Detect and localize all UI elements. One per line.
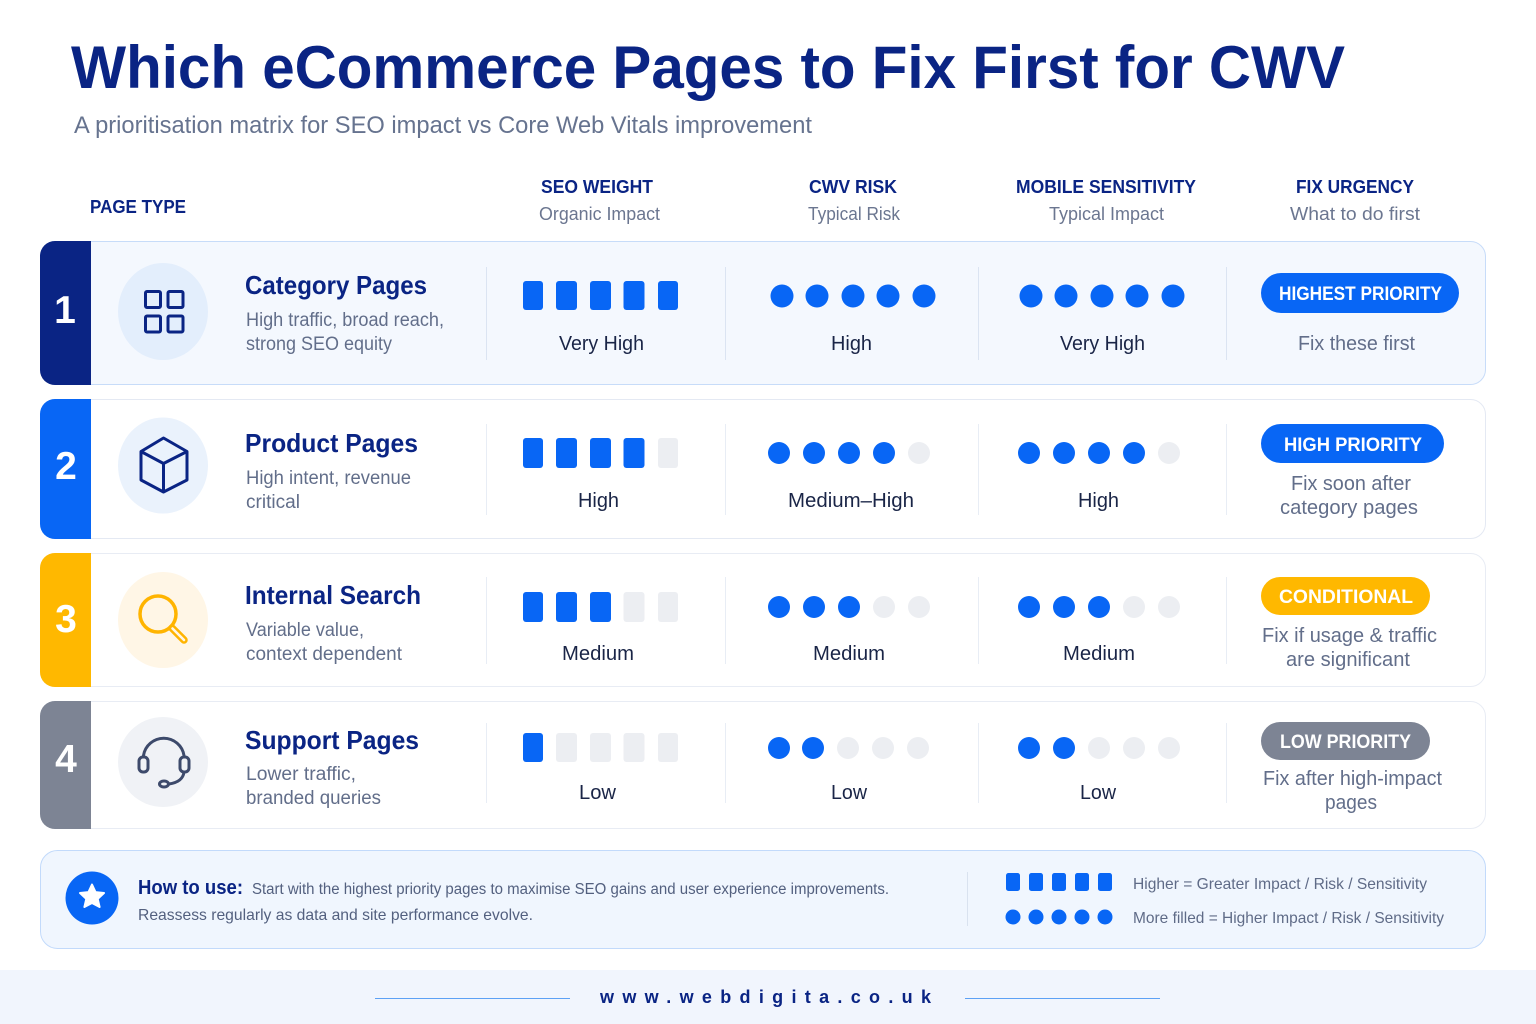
fix urgency: highest priority: HIGHEST PRIORITY (1279, 284, 1442, 305)
how to use text: How to use: (138, 877, 243, 899)
page type text: context dependent (246, 644, 403, 665)
fix urgency: low priority (1261, 722, 1442, 814)
column heading: seo weight (539, 177, 660, 224)
legend (1006, 873, 1444, 927)
seo weight rating: low (523, 733, 678, 804)
how to use text: Reassess regularly as data and site performance evolve. (138, 907, 533, 924)
rank badge 1: 1 (54, 289, 76, 332)
footer band (0, 970, 1536, 1024)
page type text: Internal Search (245, 580, 421, 610)
column heading: page type: PAGE TYPE (90, 197, 186, 217)
page type text: Lower traffic, (246, 764, 356, 785)
fix urgency: low priority: pages (1325, 792, 1377, 814)
column heading: cwv risk: CWV RISK (809, 177, 897, 197)
fix urgency: high priority: category pages (1280, 497, 1418, 519)
column heading: seo weight: Organic Impact (539, 204, 660, 224)
panel: row 1 category pages (40, 241, 1486, 385)
seo weight rating: medium (523, 592, 678, 665)
panel: row 3 internal search (40, 553, 1486, 687)
mobile sensitivity rating: medium: Medium (1063, 643, 1135, 665)
rank badge 4 (40, 701, 91, 829)
page type text: Category Pages (245, 270, 427, 300)
mobile sensitivity rating: high: High (1078, 490, 1119, 512)
fix urgency: high priority (1261, 424, 1444, 519)
seo weight rating: medium: Medium (562, 643, 634, 665)
column heading: fix urgency (1290, 177, 1420, 224)
table header (90, 177, 1420, 224)
column heading: cwv risk (808, 177, 901, 224)
column heading: mobile sensitivity: MOBILE SENSITIVITY (1016, 177, 1196, 197)
mobile sensitivity rating: low (1018, 737, 1180, 804)
mobile sensitivity rating: very high (1020, 284, 1184, 355)
page type text: branded queries (246, 788, 381, 809)
panel: how to use (40, 850, 1486, 948)
mobile sensitivity rating: high (1018, 442, 1180, 512)
page type text: Support Pages (245, 725, 419, 755)
website url: www.webdigita.co.uk (599, 987, 932, 1007)
page type text: strong SEO equity (246, 334, 392, 355)
cwv risk rating: medium: Medium (813, 643, 885, 665)
page type text (245, 725, 419, 809)
legend: bars (1006, 873, 1427, 893)
mobile sensitivity rating: low: Low (1080, 782, 1117, 804)
rank badge 2: 2 (55, 445, 77, 488)
icon: magnifying glass (118, 572, 208, 668)
fix urgency: conditional (1261, 577, 1437, 671)
page type text (245, 580, 421, 665)
cwv risk rating: high: High (831, 333, 872, 355)
how to use text: Start with the highest priority pages to maximise SEO gains and user experience improvements. (252, 881, 889, 898)
cwv risk rating: low (768, 737, 929, 804)
panel: row 4 support pages (40, 701, 1486, 829)
panel: row 2 product pages (40, 399, 1486, 539)
cwv risk rating: high (770, 284, 936, 355)
column heading: cwv risk: Typical Risk (808, 204, 901, 224)
column heading: mobile sensitivity: Typical Impact (1049, 204, 1164, 224)
column heading: fix urgency: What to do first (1290, 204, 1420, 224)
mobile sensitivity rating: very high: Very High (1060, 333, 1145, 355)
page type text: High traffic, broad reach, (246, 310, 444, 331)
seo weight rating: high: High (578, 490, 619, 512)
rank badge 1 (40, 241, 91, 385)
fix urgency: highest priority (1261, 273, 1459, 355)
seo weight rating: very high (523, 281, 678, 355)
legend: dots (1006, 910, 1444, 927)
page type text (245, 428, 418, 513)
icon: headset (118, 717, 208, 807)
legend: dots: More filled = Higher Impact / Risk / Sensitivity (1133, 910, 1444, 927)
cwv risk rating: medium-high (768, 442, 930, 512)
fix urgency: high priority: HIGH PRIORITY (1284, 435, 1422, 456)
fix urgency: conditional: Fix if usage & traffic (1262, 625, 1437, 647)
cwv risk rating: low: Low (831, 782, 868, 804)
page type text: critical (246, 492, 300, 513)
page type text: High intent, revenue (246, 468, 411, 489)
mobile sensitivity rating: medium (1018, 596, 1180, 665)
fix urgency: low priority: Fix after high-impact (1263, 768, 1442, 790)
rank badge 3 (40, 553, 91, 687)
seo weight rating: very high: Very High (559, 333, 644, 355)
column heading: mobile sensitivity (1016, 177, 1196, 224)
fix urgency: highest priority: Fix these first (1298, 333, 1415, 355)
page type text: Variable value, (246, 620, 364, 641)
fix urgency: conditional: CONDITIONAL (1279, 587, 1413, 608)
page type text (245, 270, 444, 355)
how to use text (138, 877, 889, 924)
seo weight rating: low: Low (579, 782, 617, 804)
title: Which eCommerce Pages to Fix First for CWV (71, 34, 1345, 101)
icon: star (66, 872, 118, 924)
seo weight rating: high (523, 438, 678, 512)
page type text: Product Pages (245, 428, 418, 458)
rank badge 4: 4 (55, 738, 77, 781)
column heading: fix urgency: FIX URGENCY (1296, 177, 1414, 197)
fix urgency: low priority: LOW PRIORITY (1280, 732, 1411, 753)
icon: category grid (118, 263, 208, 360)
rank badge 3: 3 (55, 598, 77, 641)
subtitle: A prioritisation matrix for SEO impact vs Core Web Vitals improvement (74, 112, 812, 139)
cwv risk rating: medium-high: Medium–High (788, 490, 914, 512)
column heading: seo weight: SEO WEIGHT (541, 177, 653, 197)
icon: product box (118, 418, 208, 514)
fix urgency: conditional: are significant (1286, 649, 1410, 671)
rank badge 2 (40, 399, 91, 539)
fix urgency: high priority: Fix soon after (1291, 473, 1411, 495)
legend: bars: Higher = Greater Impact / Risk / Sensitivity (1133, 876, 1427, 893)
cwv risk rating: medium (768, 596, 930, 665)
